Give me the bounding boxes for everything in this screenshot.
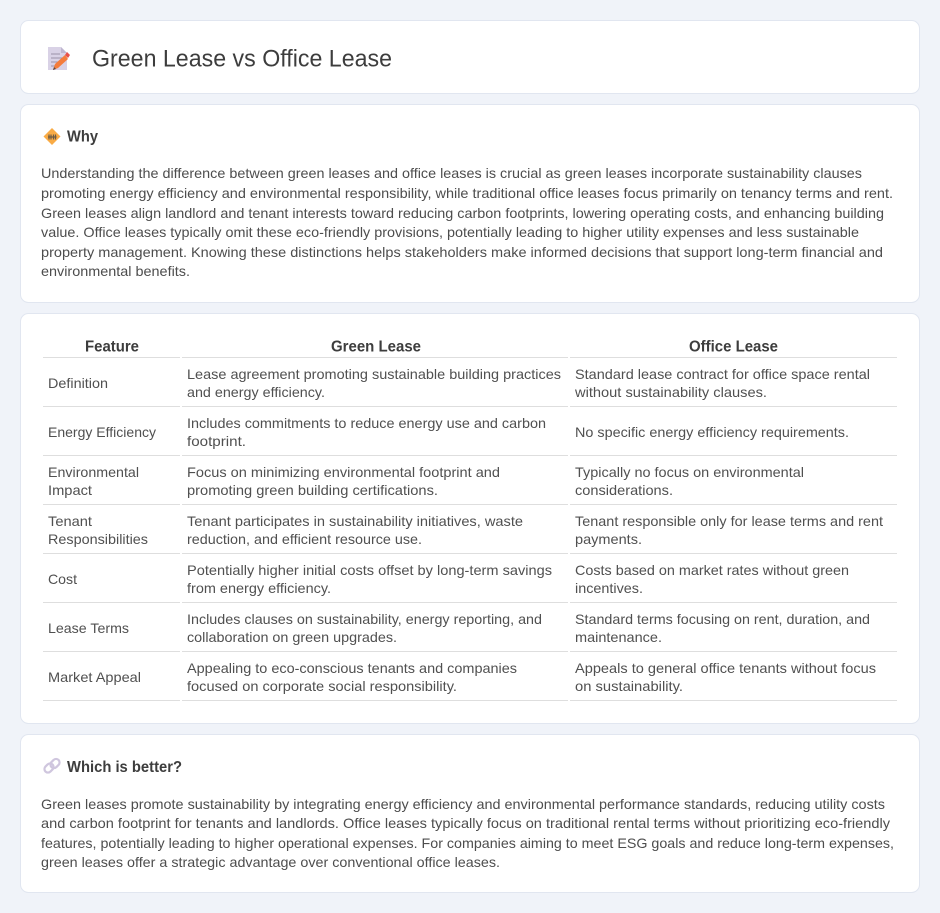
table row: environmental impact: considerations. bbox=[575, 482, 673, 498]
table row: tenant responsibilities: reduction, and efficient resource use. bbox=[187, 531, 422, 547]
icon: chain link bbox=[43, 757, 61, 774]
text block: which is better paragraph: features, potentially leading to higher operational expenses. For companies aiming to meet ESG goals and reduce long-term expenses, bbox=[41, 835, 894, 851]
table row: tenant responsibilities bbox=[43, 513, 897, 554]
table row: environmental impact: Impact bbox=[48, 482, 92, 498]
table row: tenant responsibilities: Tenant responsible only for lease terms and rent bbox=[575, 513, 883, 529]
table row: environmental impact: Typically no focus on environmental bbox=[575, 464, 804, 480]
table row: lease terms: Includes clauses on sustainability, energy reporting, and bbox=[187, 611, 542, 627]
panel: comparison table bbox=[20, 314, 920, 724]
heading: why: Why bbox=[67, 128, 98, 146]
table row: tenant responsibilities: Tenant bbox=[48, 513, 92, 529]
table row: energy efficiency: Includes commitments to reduce energy use and carbon bbox=[187, 415, 546, 431]
table header row: Office Lease bbox=[689, 338, 778, 356]
table row: energy efficiency bbox=[43, 415, 897, 456]
table header row bbox=[43, 338, 897, 358]
table row: cost bbox=[43, 562, 897, 603]
panel: why bbox=[20, 104, 920, 302]
text block: which is better paragraph: Green leases promote sustainability by integrating energy efficiency and environmental performance standards, reducing utility costs bbox=[41, 796, 885, 812]
table row: lease terms: maintenance. bbox=[575, 629, 662, 645]
text block: why paragraph: Green leases align landlord and tenant interests toward reducing carbon footprints, lowering operating costs, and enhancing building bbox=[41, 205, 884, 221]
table row: market appeal: Appealing to eco-conscious tenants and companies bbox=[187, 660, 517, 676]
table row: cost: Potentially higher initial costs offset by long-term savings bbox=[187, 562, 552, 578]
text block: why paragraph: environmental benefits. bbox=[41, 263, 190, 279]
table row: definition bbox=[43, 366, 897, 407]
text block: why paragraph: property management. Knowing these distinctions helps stakeholders make informed decisions that support long-term financial and bbox=[41, 244, 883, 260]
table row: cost: incentives. bbox=[575, 580, 643, 596]
table row: definition: and energy efficiency. bbox=[187, 384, 325, 400]
table row: market appeal: Market Appeal bbox=[48, 669, 141, 685]
table row: energy efficiency: footprint. bbox=[187, 433, 246, 449]
text block: which is better paragraph: green leases offer a strategic advantage over conventional office leases. bbox=[41, 854, 500, 870]
text block: why paragraph: promoting energy efficiency and environmental responsibility, while traditional office leases focus primarily on tenancy terms and rent. bbox=[41, 185, 893, 201]
heading: which is better: Which is better? bbox=[67, 759, 182, 776]
table row: tenant responsibilities: payments. bbox=[575, 531, 642, 547]
table row: environmental impact bbox=[43, 464, 897, 505]
table row: lease terms bbox=[43, 611, 897, 652]
table row: market appeal: Appeals to general office tenants without focus bbox=[575, 660, 876, 676]
table row: tenant responsibilities: Tenant participates in sustainability initiatives, waste bbox=[187, 513, 523, 529]
table row: definition: Standard lease contract for office space rental bbox=[575, 366, 870, 382]
table row: lease terms: collaboration on green upgrades. bbox=[187, 629, 397, 645]
table row: energy efficiency: Energy Efficiency bbox=[48, 424, 156, 440]
table header row: Feature bbox=[85, 338, 139, 356]
icon: orange diamond sign bbox=[44, 128, 60, 145]
table row: market appeal bbox=[43, 660, 897, 701]
table row: market appeal: focused on corporate social responsibility. bbox=[187, 678, 457, 694]
table row: definition: Definition bbox=[48, 375, 108, 391]
table header row: Green Lease bbox=[331, 338, 421, 356]
table row: energy efficiency: No specific energy efficiency requirements. bbox=[575, 424, 849, 440]
table row: cost: Cost bbox=[48, 571, 77, 587]
table row: lease terms: Standard terms focusing on rent, duration, and bbox=[575, 611, 870, 627]
text block: why paragraph: value. Office leases typically omit these eco-friendly provisions, potentially leading to higher utility expenses and less sustainable bbox=[41, 224, 859, 240]
panel: title header bbox=[20, 20, 920, 94]
text block: why paragraph: Understanding the difference between green leases and office leases is crucial as green leases incorporate sustainability clauses bbox=[41, 165, 862, 181]
table row: definition: without sustainability clauses. bbox=[574, 384, 767, 400]
text block: which is better paragraph: and carbon footprint for tenants and landlords. Office leases typically focus on traditional rental terms without prioritizing eco-friendly bbox=[41, 815, 890, 831]
panel: which is better bbox=[20, 734, 920, 892]
table row: tenant responsibilities: Responsibilities bbox=[48, 531, 148, 547]
table row: environmental impact: Environmental bbox=[48, 464, 139, 480]
title: Green Lease vs Office Lease bbox=[92, 46, 392, 72]
icon: memo with pencil bbox=[48, 47, 70, 70]
table row: definition: Lease agreement promoting sustainable building practices bbox=[187, 366, 561, 382]
table row: environmental impact: Focus on minimizing environmental footprint and bbox=[187, 464, 500, 480]
table row: cost: from energy efficiency. bbox=[187, 580, 331, 596]
table row: environmental impact: promoting green building certifications. bbox=[187, 482, 438, 498]
text block: why paragraph bbox=[41, 165, 893, 279]
text block: which is better paragraph bbox=[41, 796, 894, 870]
table row: market appeal: on sustainability. bbox=[575, 678, 683, 694]
table row: cost: Costs based on market rates without green bbox=[575, 562, 849, 578]
table row: lease terms: Lease Terms bbox=[48, 620, 129, 636]
